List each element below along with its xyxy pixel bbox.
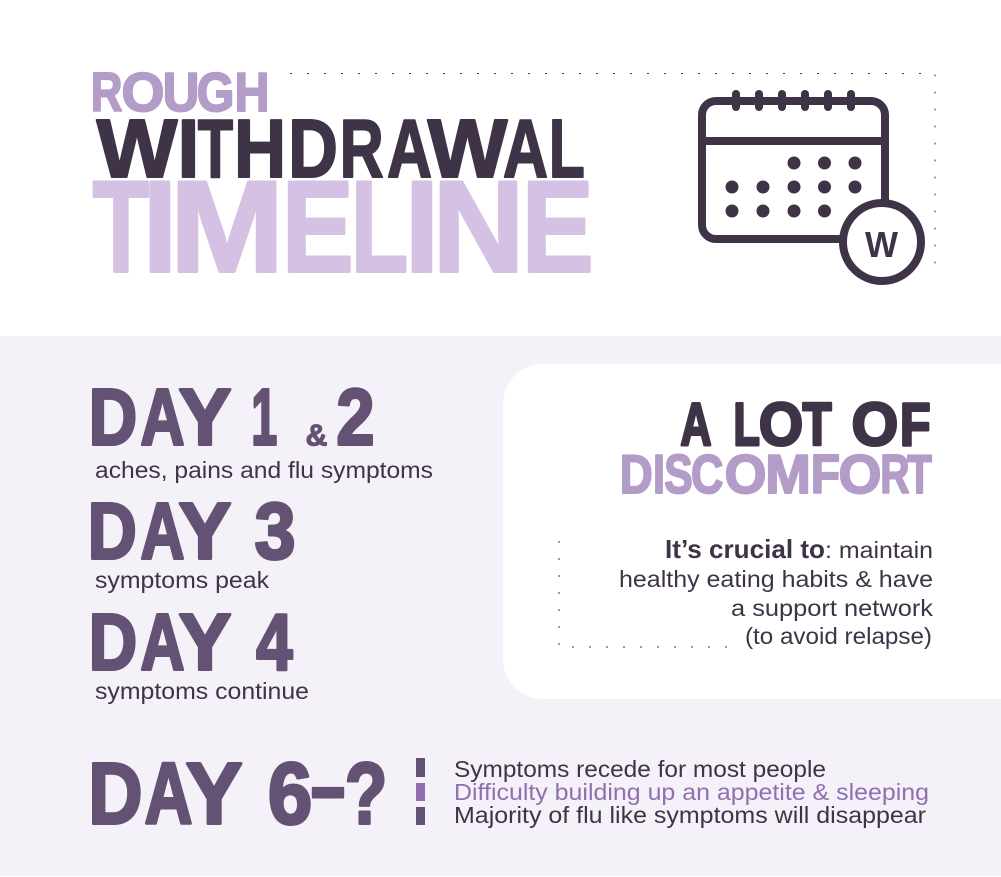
title line: withdrawal: L — [549, 102, 585, 195]
title line: timeline: I — [143, 154, 177, 300]
timeline: day 4: A — [140, 598, 184, 686]
title line: timeline: L — [351, 154, 408, 300]
timeline: day 4 — [89, 598, 309, 704]
heading: a lot of: O — [759, 391, 803, 458]
heading: discomfort: M — [765, 443, 811, 505]
icon: calendar with week badge: W — [865, 224, 898, 265]
timeline: day 3: Y — [179, 486, 231, 576]
title line: withdrawal: H — [234, 102, 286, 195]
title line: timeline: T — [93, 154, 149, 300]
heading: a lot of: O — [852, 391, 898, 458]
heading: discomfort: O — [725, 443, 766, 505]
advice text: healthy eating habits & have — [619, 566, 933, 592]
heading: discomfort: I — [653, 443, 665, 505]
title line: timeline: N — [433, 154, 524, 300]
timeline: day 6 onward: A — [144, 746, 192, 842]
heading: a lot of: A — [680, 391, 712, 458]
heading: a lot of: T — [803, 391, 832, 458]
timeline: day 3: 3 — [255, 486, 296, 576]
advice text — [619, 534, 934, 649]
title line: rough — [91, 61, 269, 123]
timeline: day 1 and 2 — [89, 372, 433, 483]
heading: a lot of: F — [900, 391, 930, 458]
advice text: It’s crucial to — [665, 534, 825, 564]
title line: withdrawal: T — [198, 102, 233, 195]
timeline: day 4: D — [89, 598, 137, 686]
heading: discomfort: D — [620, 443, 653, 505]
recovery notes: Symptoms recede for most people — [454, 756, 826, 782]
timeline: day 6 onward: ? — [345, 746, 387, 842]
timeline: day 3: symptoms peak — [95, 567, 270, 593]
title line: rough: H — [235, 61, 269, 123]
title line: withdrawal: A — [503, 102, 548, 195]
advice text: a support network — [731, 595, 934, 621]
heading: discomfort: F — [811, 443, 840, 505]
timeline: day 6 onward: Y — [186, 746, 242, 842]
timeline: day 3: A — [140, 486, 184, 576]
timeline: day 1 and 2: 1 — [251, 372, 277, 462]
title line: timeline: M — [170, 154, 284, 300]
title line: rough: G — [197, 61, 234, 123]
title line: withdrawal: R — [340, 102, 384, 195]
heading: discomfort: S — [664, 443, 693, 505]
timeline: day 3: D — [88, 486, 137, 576]
title line: timeline: E — [522, 154, 594, 300]
title line: timeline: I — [405, 154, 439, 300]
heading: a lot of — [680, 391, 930, 458]
recovery notes: Difficulty building up an appetite & sleeping — [454, 779, 929, 805]
timeline: day 1 and 2: aches, pains and flu symptoms — [95, 457, 433, 483]
heading: discomfort: R — [880, 443, 910, 505]
title line: withdrawal: D — [288, 102, 338, 195]
panel: a lot of discomfort — [503, 364, 1001, 699]
timeline: day 1 and 2: D — [89, 372, 137, 462]
advice text: (to avoid relapse) — [745, 623, 932, 649]
timeline: day 4: symptoms continue — [95, 678, 309, 704]
title line: withdrawal: W — [97, 102, 178, 195]
title line: withdrawal: A — [387, 102, 432, 195]
heading: discomfort: O — [838, 443, 881, 505]
timeline: day 1 and 2: & — [306, 418, 328, 452]
heading: discomfort: T — [907, 443, 932, 505]
title line: timeline — [93, 154, 594, 300]
title line: withdrawal: W — [428, 102, 508, 195]
timeline: day 4: 4 — [256, 598, 293, 686]
timeline: day 4: Y — [179, 598, 231, 686]
title — [91, 61, 594, 300]
title line: rough: O — [122, 61, 164, 123]
timeline: day 1 and 2: A — [140, 372, 184, 462]
title line: rough: R — [91, 61, 122, 123]
heading: a lot of: L — [734, 391, 760, 458]
heading: discomfort — [620, 443, 932, 505]
timeline: day 3 — [88, 486, 296, 593]
title line: withdrawal — [97, 102, 585, 195]
timeline: day 6 onward — [88, 738, 929, 842]
timeline: day 1 and 2: Y — [179, 372, 231, 462]
timeline: day 6 onward: 6 — [268, 746, 312, 842]
title line: timeline: E — [282, 154, 354, 300]
recovery notes: Majority of flu like symptoms will disappear — [454, 802, 926, 828]
title line: rough: U — [163, 61, 199, 123]
timeline: day 1 and 2: 2 — [336, 372, 374, 462]
timeline: day 6 onward: – — [311, 738, 345, 835]
icon: calendar with week badge — [702, 94, 921, 281]
advice text: : maintain — [825, 537, 933, 563]
heading: discomfort: C — [691, 443, 723, 505]
title line: withdrawal: I — [177, 102, 200, 195]
recovery notes — [454, 756, 929, 828]
timeline: day 6 onward: D — [88, 746, 143, 842]
